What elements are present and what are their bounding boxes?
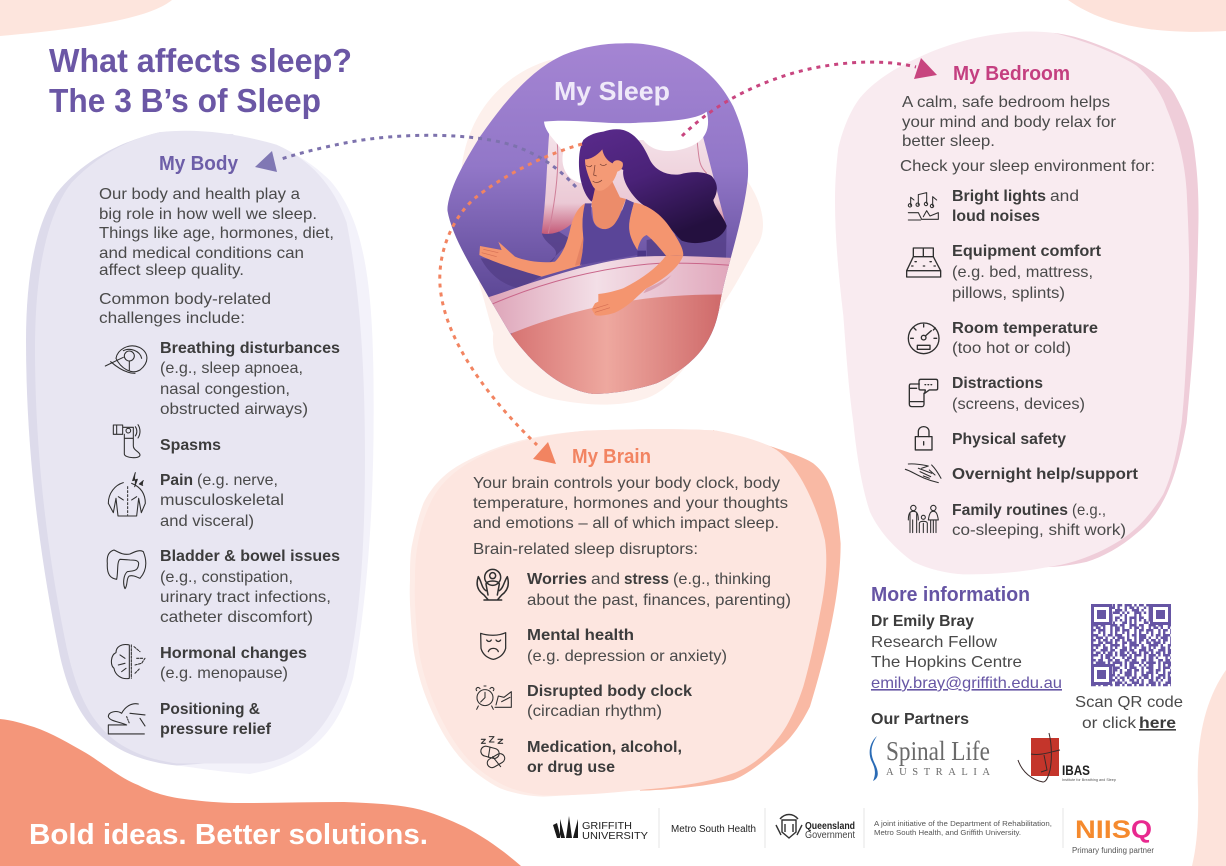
- footer logos: [553, 808, 1154, 855]
- divider: [659, 808, 1063, 848]
- icon: brain hormones: [111, 645, 145, 679]
- item: bright lights: [952, 188, 1079, 225]
- panel fill: [35, 131, 365, 763]
- intro text: Common body-related: [99, 291, 271, 308]
- item: distractions: [952, 375, 1085, 413]
- item: bladder and bowel: Bladder & bowel issues: [160, 548, 340, 565]
- left arm: [479, 203, 585, 277]
- item: physical safety: Physical safety: [952, 431, 1066, 448]
- item: worries and stress: Worries: [527, 571, 587, 588]
- heading: My Sleep: My Sleep: [554, 76, 670, 106]
- item: family routines: (e.g.,: [1072, 502, 1106, 519]
- item: breathing disturbances: obstructed airways): [160, 401, 308, 418]
- joint initiative note: A joint initiative of the Department of Rehabilitation,: [874, 821, 1052, 828]
- item: pain: musculoskeletal: [160, 492, 284, 509]
- blanket: [511, 294, 722, 394]
- icon: worries hands: [477, 569, 508, 600]
- logo: Spinal Life Australia: [870, 736, 990, 781]
- icon: helping hands: [905, 464, 941, 483]
- neck and chest: [592, 180, 626, 229]
- icon: padlock: [915, 427, 932, 450]
- icon: pills zzz: [480, 737, 506, 769]
- QR caption: [1075, 694, 1183, 732]
- icon: lights and noise: [908, 193, 938, 220]
- intro text: affect sleep quality.: [99, 262, 244, 279]
- QR caption: here: [1139, 715, 1176, 732]
- item: pain: and visceral): [160, 513, 254, 530]
- background corner: bottom right: [1192, 670, 1226, 866]
- item: hormonal changes: [160, 645, 307, 682]
- item: medication: Medication, alcohol,: [527, 739, 682, 756]
- background corner: top right: [1068, 0, 1226, 32]
- more information: Dr Emily Bray: [871, 613, 974, 630]
- item: family routines: [952, 502, 1126, 539]
- intro text: [900, 94, 1155, 175]
- intro text: big role in how well we sleep.: [99, 206, 317, 223]
- item: distractions: (screens, devices): [952, 396, 1085, 413]
- heading: My Bedroom: My Bedroom: [953, 63, 1070, 85]
- item: bright lights: and: [1050, 188, 1079, 205]
- item: mental health: Mental health: [527, 627, 634, 644]
- sheet: [488, 256, 731, 334]
- logo: Queensland Government: [776, 814, 855, 841]
- icon: back pain: [108, 473, 145, 516]
- item: worries and stress: (e.g., thinking: [673, 571, 771, 588]
- intro text: and medical conditions can: [99, 245, 304, 262]
- logo: IBAS: [1018, 733, 1117, 782]
- intro text: Your brain controls your body clock, body: [473, 475, 780, 492]
- item: worries and stress: stress: [624, 571, 669, 588]
- item: breathing disturbances: [160, 340, 340, 418]
- icon: family: [908, 505, 938, 533]
- title: [49, 42, 352, 119]
- item: room temperature: (too hot or cold): [952, 340, 1071, 357]
- logo: Spinal Life Australia: Spinal Life: [886, 736, 990, 766]
- arrow: to my brain: [440, 144, 582, 464]
- intro text: [99, 186, 334, 327]
- item: distractions: Distractions: [952, 375, 1043, 392]
- item: bright lights: loud noises: [952, 208, 1040, 225]
- item: pain: (e.g. nerve,: [197, 472, 278, 489]
- item: bladder and bowel: urinary tract infections,: [160, 589, 331, 606]
- title: What affects sleep?: [49, 42, 352, 79]
- intro text: Brain-related sleep disruptors:: [473, 541, 698, 558]
- intro text: A calm, safe bedroom helps: [902, 94, 1110, 111]
- item: mental health: (e.g. depression or anxiety): [527, 648, 727, 665]
- icon: bowel: [107, 550, 146, 589]
- forearm and hand: [592, 255, 683, 316]
- item: mental health: [527, 627, 727, 665]
- item: disrupted body clock: (circadian rhythm): [527, 703, 662, 720]
- joint initiative note: [874, 821, 1052, 837]
- logo: IBAS: IBAS: [1062, 762, 1090, 778]
- panel fill: [415, 429, 826, 795]
- icon: sad mask: [481, 633, 506, 659]
- item: worries and stress: and: [591, 571, 620, 588]
- intro text: Check your sleep environment for:: [900, 158, 1155, 175]
- QR caption: Scan QR code: [1075, 694, 1183, 711]
- blob behind illustration: [461, 58, 763, 405]
- logo: Griffith University: [553, 816, 648, 842]
- icon: bed: [907, 248, 941, 277]
- item: bladder and bowel: catheter discomfort): [160, 609, 313, 626]
- intro text: [473, 475, 788, 558]
- item: pain: Pain: [160, 472, 193, 489]
- item: bright lights: Bright lights: [952, 188, 1046, 205]
- logo: Queensland Government: Queensland: [805, 821, 855, 832]
- panel: my body: [26, 131, 374, 774]
- item: positioning: Positioning &: [160, 701, 260, 718]
- illustration: my sleep: [440, 40, 763, 407]
- intro text: temperature, hormones and your thoughts: [473, 495, 788, 512]
- panel: my brain: [410, 429, 841, 797]
- logo: NIISQ: NIIS: [1075, 816, 1131, 844]
- more information: More information: [871, 584, 1030, 606]
- item: bladder and bowel: (e.g., constipation,: [160, 569, 293, 586]
- icon: spasm leg: [113, 425, 140, 458]
- logo: NIISQ: Q: [1131, 816, 1152, 844]
- more information: emily.bray@griffith.edu.au: [871, 675, 1062, 692]
- item: worries and stress: [527, 571, 791, 609]
- logo: NIISQ: Primary funding partner: [1072, 846, 1154, 855]
- hair: [579, 129, 727, 243]
- intro text: better sleep.: [902, 133, 995, 150]
- icon: gauge: [908, 323, 939, 354]
- background corner: bottom left salmon: [0, 719, 521, 866]
- upper arm: [629, 203, 683, 256]
- intro text: challenges include:: [99, 310, 245, 327]
- icon: breathing: [105, 346, 147, 373]
- panel backing shapes: [410, 429, 841, 797]
- item: disrupted body clock: [527, 683, 692, 720]
- title: The 3 B’s of Sleep: [49, 82, 321, 119]
- item: positioning: pressure relief: [160, 721, 272, 738]
- heading: My Body: My Body: [159, 153, 239, 175]
- tank top: [580, 199, 637, 265]
- item: hormonal changes: Hormonal changes: [160, 645, 307, 662]
- QR code: [1091, 604, 1171, 685]
- panel fill: [835, 32, 1189, 574]
- item: positioning: [160, 701, 272, 738]
- logo: Griffith University: GRIFFITH: [582, 821, 632, 832]
- tagline: Bold ideas. Better solutions.: [29, 819, 428, 851]
- arrow: to my bedroom: [682, 58, 937, 136]
- our partners heading: Our Partners: [871, 711, 969, 728]
- arrow: to my body: [255, 135, 576, 187]
- icon: alarm clock: [476, 686, 511, 709]
- intro text: Our body and health play a: [99, 186, 300, 203]
- item: family routines: co-sleeping, shift work): [952, 522, 1126, 539]
- more information: Research Fellow: [871, 634, 997, 651]
- item: room temperature: Room temperature: [952, 320, 1098, 337]
- logo: Spinal Life Australia: AUSTRALIA: [886, 767, 990, 778]
- item: breathing disturbances: nasal congestion,: [160, 381, 290, 398]
- item: equipment comfort: Equipment comfort: [952, 243, 1102, 260]
- logo: Queensland Government: Government: [805, 830, 855, 841]
- intro text: and emotions – all of which impact sleep.: [473, 515, 779, 532]
- item: worries and stress: about the past, finances, parenting): [527, 592, 791, 609]
- joint initiative note: Metro South Health, and Griffith University.: [874, 830, 1021, 837]
- panel backing shapes: [26, 131, 374, 774]
- panel backing shape: [835, 32, 1199, 574]
- item: medication: or drug use: [527, 759, 615, 776]
- item: equipment comfort: pillows, splints): [952, 285, 1065, 302]
- item: breathing disturbances: (e.g., sleep apnoea,: [160, 360, 303, 377]
- more information: [871, 584, 1062, 692]
- item: equipment comfort: (e.g. bed, mattress,: [952, 264, 1093, 281]
- item: breathing disturbances: Breathing disturbances: [160, 340, 340, 357]
- logo: Griffith University: UNIVERSITY: [582, 831, 648, 842]
- item: hormonal changes: (e.g. menopause): [160, 665, 288, 682]
- item: medication: [527, 739, 682, 776]
- heading: My Brain: My Brain: [572, 446, 651, 468]
- panel: my bedroom: [835, 32, 1199, 574]
- icon: phone and chat: [909, 379, 938, 407]
- item: overnight help: Overnight help/support: [952, 466, 1139, 483]
- pillow: [542, 123, 725, 234]
- more information: The Hopkins Centre: [871, 654, 1022, 671]
- item: bladder and bowel: [160, 548, 340, 626]
- icon: positioning: [108, 704, 145, 734]
- background corner: top left: [0, 0, 172, 36]
- QR caption: or click: [1082, 715, 1137, 732]
- intro text: your mind and body relax for: [902, 114, 1117, 131]
- item: spasms: Spasms: [160, 437, 221, 454]
- item: pain: [160, 472, 284, 530]
- item: disrupted body clock: Disrupted body clock: [527, 683, 692, 700]
- logo: IBAS: Institute for Breathing and Sleep: [1062, 777, 1117, 782]
- intro text: Things like age, hormones, diet,: [99, 225, 334, 242]
- item: family routines: Family routines: [952, 502, 1068, 519]
- item: equipment comfort: [952, 243, 1102, 302]
- sleeping woman scene: [440, 40, 760, 407]
- item: room temperature: [952, 320, 1098, 357]
- logo: Metro South Health: Metro South Health: [671, 824, 756, 835]
- logo: NIISQ: [1072, 816, 1154, 855]
- face: [585, 149, 623, 191]
